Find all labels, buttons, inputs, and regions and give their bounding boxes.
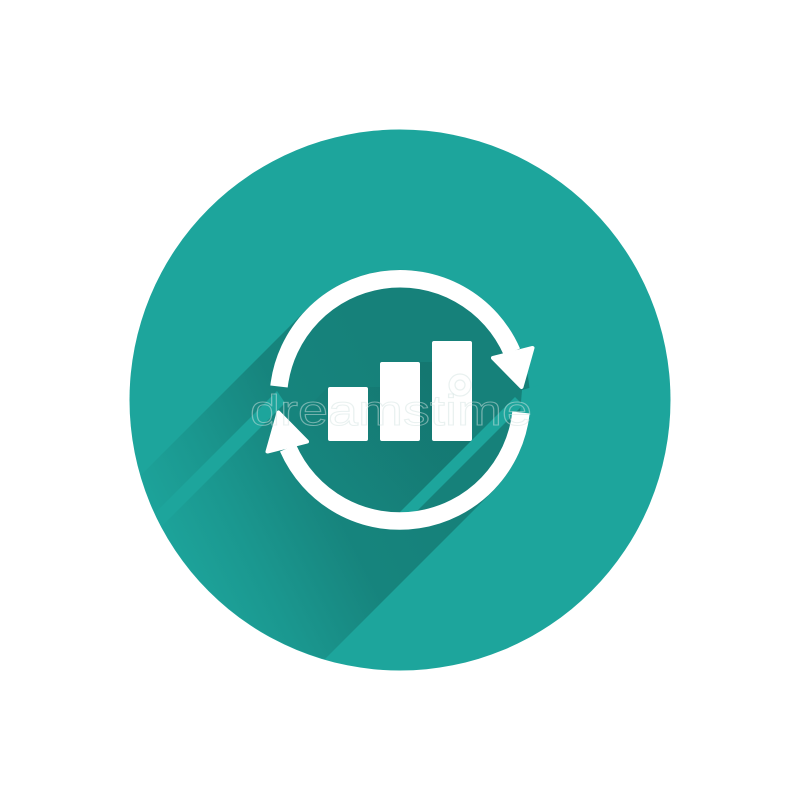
watermark (250, 374, 532, 435)
long shadow of the ring (163, 270, 530, 659)
bar chart (328, 341, 472, 441)
icon badge: chart with refresh arrows (130, 130, 670, 670)
watermark: dreamstime (250, 387, 532, 435)
shadow of the bars (380, 341, 472, 448)
arrow: lower clockwise arc (268, 412, 521, 521)
arrow: upper clockwise arc (279, 279, 532, 387)
green circle background (130, 130, 670, 670)
